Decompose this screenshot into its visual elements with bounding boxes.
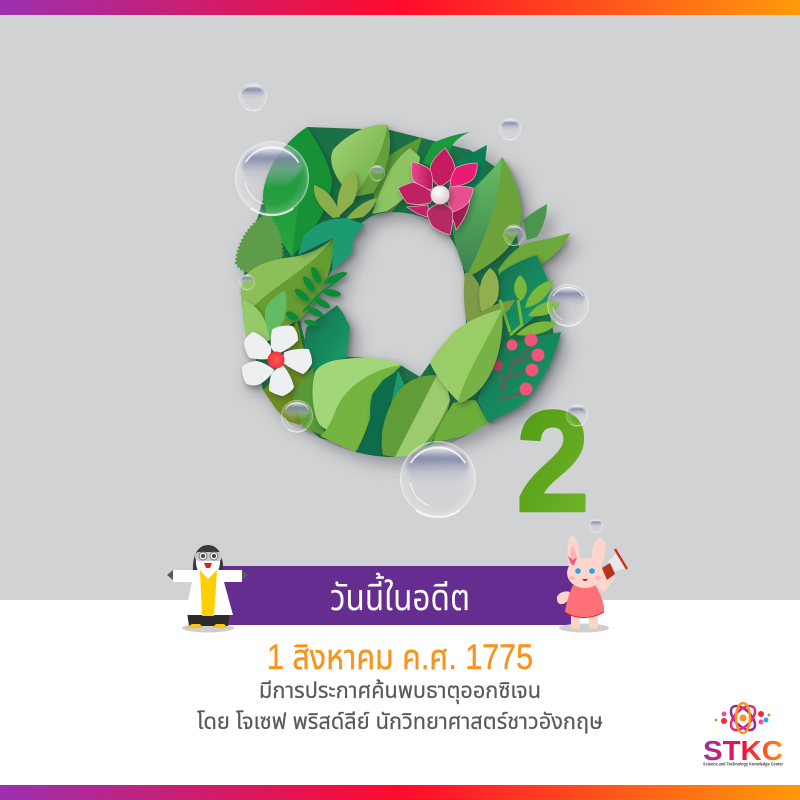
logo wordmark: STKC bbox=[703, 735, 783, 766]
white flower bbox=[243, 327, 311, 395]
leaf: sawtooth green bbox=[236, 213, 282, 273]
ring base with hole bbox=[242, 127, 555, 457]
leaf: dark green curl bbox=[422, 132, 470, 170]
sprig: light green right bbox=[500, 275, 561, 335]
leaf: bottom big bbox=[313, 358, 402, 452]
background: grey upper panel bbox=[0, 14, 800, 600]
water drops bbox=[235, 83, 603, 533]
number 2 of O2: 2 bbox=[516, 382, 590, 542]
illustration: leaf letter O bbox=[236, 125, 570, 458]
leaf: dark teal bottom bbox=[355, 370, 408, 458]
leaf: light green top bbox=[331, 125, 390, 197]
leaf: berries bbox=[477, 332, 561, 422]
logo atom icon bbox=[714, 702, 770, 734]
leaves: small olive right of hole bbox=[464, 273, 483, 323]
flower centre: pearl bbox=[430, 186, 450, 204]
leaf: bottom small right bbox=[433, 400, 495, 442]
leaf: large right of hole bottom bbox=[430, 309, 502, 403]
leaf: top trio olive bbox=[314, 170, 377, 220]
leaf: big dark green bbox=[263, 127, 332, 257]
leaf: teal right bbox=[497, 255, 549, 333]
leaf: teal top right bbox=[454, 145, 499, 188]
date heading: 1 สิงหาคม ค.ศ. 1775 bbox=[267, 638, 533, 677]
leaf: light left small bbox=[242, 300, 270, 350]
description line 1: มีการประกาศค้นพบธาตุออกซิเจน bbox=[259, 678, 541, 704]
banner title: วันนี้ในอดีต bbox=[330, 572, 470, 618]
leaf: dark behind berries bbox=[476, 345, 510, 422]
leaf: teal fern at upper hole bbox=[298, 218, 365, 272]
logo: STKC bbox=[703, 702, 783, 766]
leaf: small upper right bbox=[523, 204, 547, 240]
leaf: teal left bottom bbox=[305, 305, 350, 373]
logo tagline: Science and Technology Knowledge Center bbox=[703, 762, 783, 766]
leaf: under white flower bbox=[263, 320, 313, 425]
branch with red berries bbox=[492, 334, 544, 400]
character: rabbit with megaphone bbox=[557, 535, 627, 632]
pink flower bbox=[398, 148, 477, 235]
sprig: dark green left bbox=[284, 265, 347, 328]
top gradient band bbox=[0, 0, 800, 15]
leaf: fan bottom bbox=[382, 375, 450, 458]
leaf: medium green top bbox=[373, 137, 422, 212]
description line 2: โดย โจเซฟ พริสด์ลีย์ นักวิทยาศาสตร์ชาวอังกฤษ bbox=[197, 709, 603, 734]
character: penguin scientist bbox=[167, 545, 248, 632]
leaf: large left bbox=[241, 238, 333, 345]
leaf: upper right long bbox=[498, 233, 570, 280]
bottom gradient band bbox=[0, 785, 800, 800]
banner: purple title bar bbox=[222, 566, 574, 625]
leaf: upper right large bbox=[453, 157, 521, 275]
flower centre: red bbox=[268, 352, 284, 368]
